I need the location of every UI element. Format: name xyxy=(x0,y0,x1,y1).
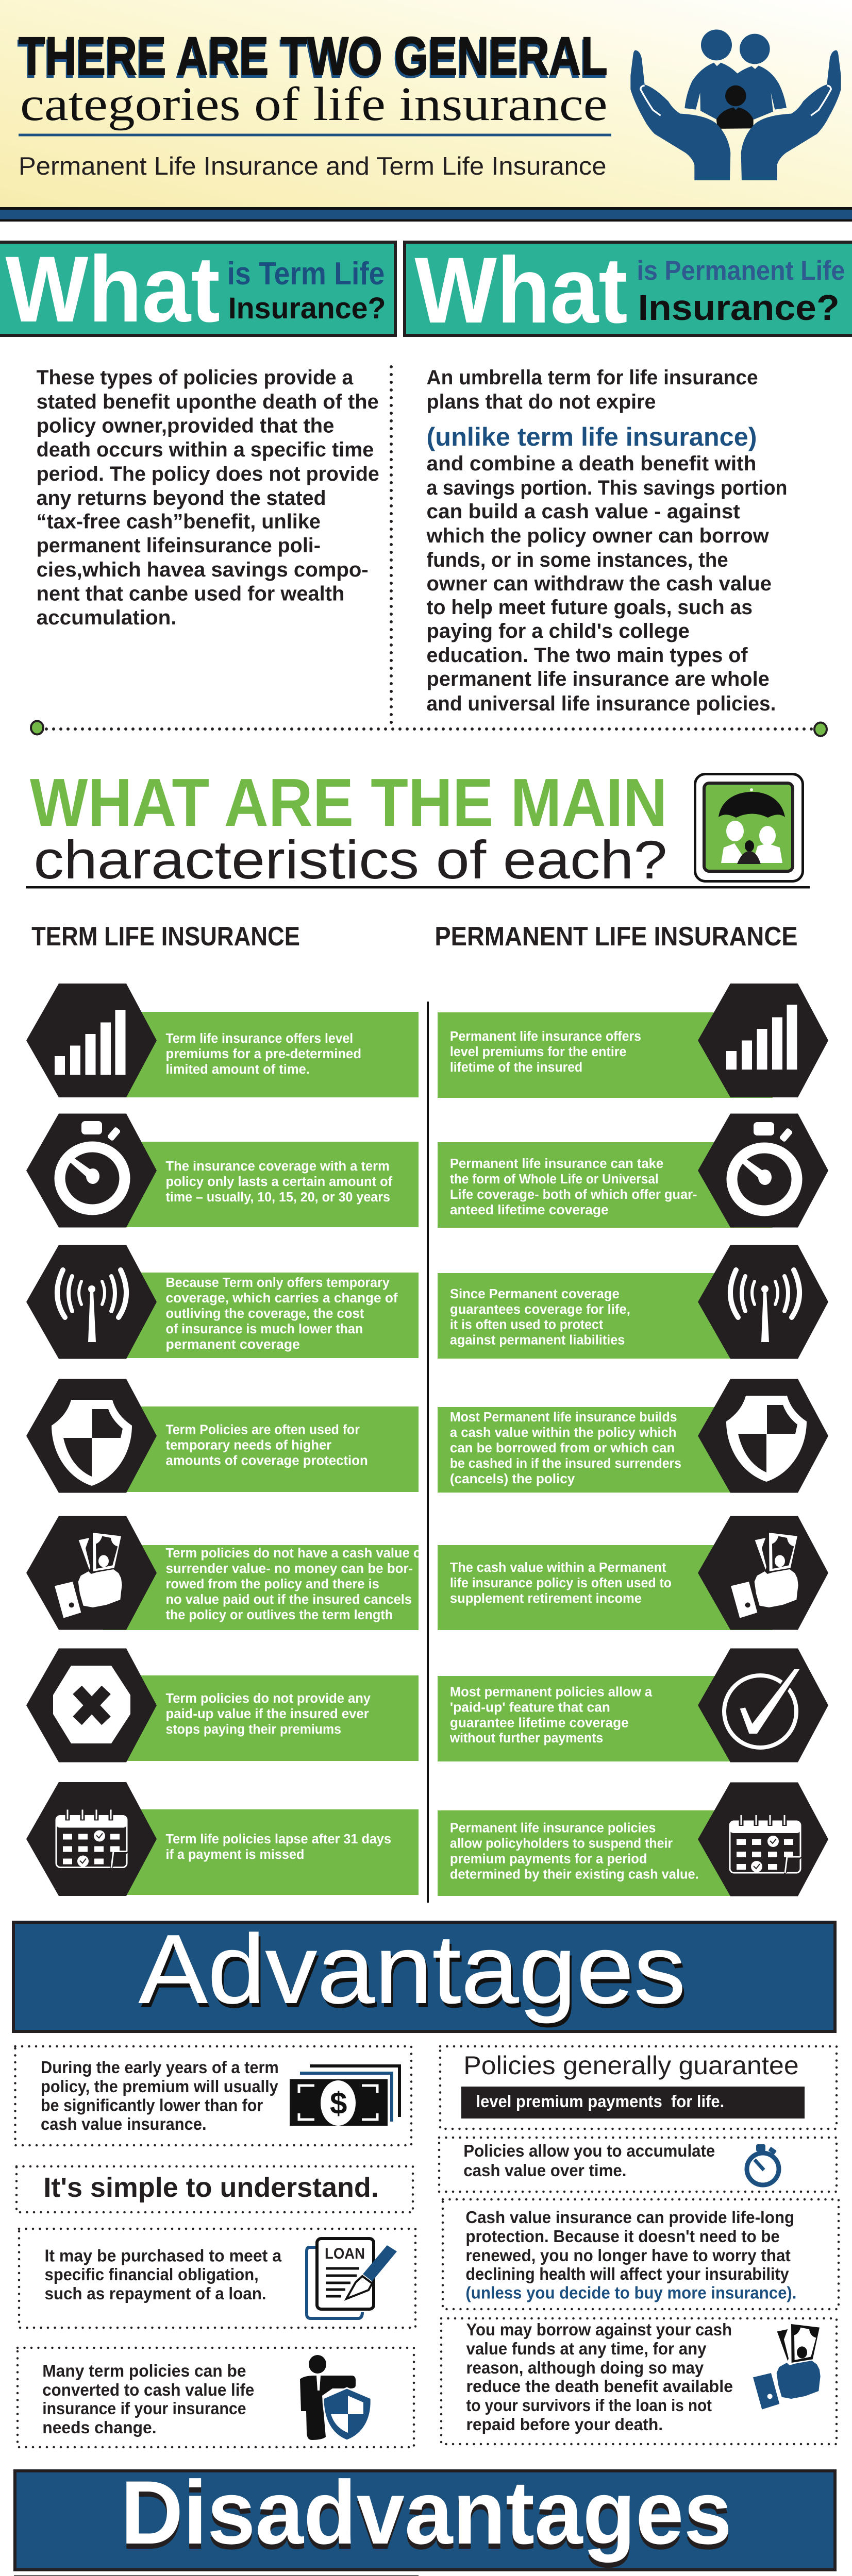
panel: what is permanent life insurance heading: What xyxy=(414,238,628,343)
row 6 permanent: paid-up feature: without further payments xyxy=(449,1731,603,1745)
row 4 permanent: builds cash value xyxy=(438,1379,828,1493)
text block: permanent life definition: and combine a death benefit with xyxy=(427,452,756,475)
row 6 term: no paid-up value: paid-up value if the insured ever xyxy=(166,1706,369,1721)
panel: borrow against cash value: You may borrow against your cash xyxy=(466,2320,732,2340)
row 5 term: no cash value: no value paid out if the insured cancels xyxy=(166,1592,412,1607)
row 4 term: temporary needs xyxy=(26,1379,419,1493)
text block: permanent life definition: can build a cash value - against xyxy=(427,500,740,523)
row 4 permanent: builds cash value: a cash value within the policy which xyxy=(450,1425,676,1440)
row 6 term: no paid-up value xyxy=(26,1649,419,1762)
text block: term life definition: nent that canbe used for wealth xyxy=(37,582,344,605)
row 7 term: lapse after 31 days: if a payment is missed xyxy=(166,1847,304,1862)
row 2 term: coverage period: time – usually, 10, 15, 20, or 30 years xyxy=(166,1190,390,1205)
row 3 term: temporary coverage: permanent coverage xyxy=(166,1337,300,1352)
panel: borrow against cash value: reason, although doing so may xyxy=(466,2359,704,2378)
row 3 term: temporary coverage: of insurance is much lower than xyxy=(166,1321,363,1336)
row 7 term: lapse after 31 days xyxy=(26,1782,419,1896)
row 3 permanent: guaranteed for life xyxy=(438,1245,828,1359)
panel: financial obligation: such as repayment of a loan. xyxy=(44,2284,266,2303)
row 3 term: temporary coverage: coverage, which carries a change of xyxy=(166,1291,398,1306)
panel: financial obligation: specific financial obligation, xyxy=(44,2265,259,2284)
row 2 term: coverage period xyxy=(26,1114,419,1227)
text block: permanent life definition: and universal life insurance policies. xyxy=(427,692,776,715)
text block: permanent life definition xyxy=(426,366,788,715)
text block: term life definition: death occurs within a specific time xyxy=(37,438,374,461)
icon: dollar bill stack: $ xyxy=(330,2086,347,2121)
row 7 permanent: suspend payments xyxy=(438,1783,828,1896)
row 1 permanent: level premiums: Permanent life insurance offers xyxy=(450,1029,641,1044)
row 1 permanent: level premiums xyxy=(438,984,828,1098)
panel: borrow against cash value: value funds at any time, for any xyxy=(466,2340,707,2359)
icon: man with shield xyxy=(300,2355,371,2441)
row 1 term: level premiums: premiums for a pre-determined xyxy=(166,1046,361,1061)
header panel xyxy=(0,0,852,222)
panel: convertible term policies xyxy=(18,2348,414,2447)
row 7 permanent: suspend payments: Permanent life insurance policies xyxy=(450,1820,656,1835)
row 2 term: coverage period: policy only lasts a certain amount of xyxy=(166,1174,392,1189)
panel: life-long protection: declining health will affect your insurability xyxy=(465,2265,789,2284)
text block: term life definition: cies,which havea savings compo- xyxy=(37,558,369,581)
row 3 term: temporary coverage: outliving the coverage, the cost xyxy=(166,1306,364,1321)
text block: permanent life definition: education. The two main types of xyxy=(427,643,748,667)
text block: permanent life definition: which the policy owner can borrow xyxy=(426,524,770,547)
row 3 permanent: guaranteed for life: guarantees coverage for life, xyxy=(450,1302,630,1317)
panel: term insurance disadvantages xyxy=(14,2575,419,2576)
panel: life-long protection: renewed, you no longer have to worry that xyxy=(465,2246,791,2265)
column heading: permanent life insurance: PERMANENT LIFE INSURANCE xyxy=(435,922,798,952)
column heading: term life insurance: TERM LIFE INSURANCE xyxy=(31,922,300,952)
title line 1: THERE ARE TWO GENERAL xyxy=(19,26,608,86)
panel: early years premium lower: be significantly lower than for xyxy=(41,2096,263,2115)
text block: term life definition: policy owner,provided that the xyxy=(37,414,334,437)
panel: life-long protection: (unless you decide to buy more insurance). xyxy=(465,2283,796,2302)
row 7 permanent: suspend payments: allow policyholders to suspend their xyxy=(450,1836,673,1851)
row 4 term: temporary needs: temporary needs of higher xyxy=(166,1437,331,1452)
row 5 permanent: supplement retirement: supplement retirement income xyxy=(450,1591,642,1606)
panel: accumulate cash value: Policies allow you to accumulate xyxy=(463,2142,715,2161)
text block: term life definition: any returns beyond the stated xyxy=(37,486,326,510)
panel: borrow against cash value: to your survivors if the loan is not xyxy=(466,2396,712,2415)
panel: what is permanent life insurance heading xyxy=(405,238,852,343)
row 5 term: no cash value: surrender value- no money can be bor- xyxy=(166,1561,413,1576)
panel: financial obligation: It may be purchased to meet a xyxy=(44,2246,282,2265)
text block: term life definition: period. The policy does not provide xyxy=(37,462,379,485)
heading: what are the main characteristics: characteristics of each? xyxy=(34,829,667,890)
text block: term life definition: stated benefit uponthe death of the xyxy=(37,390,379,413)
panel: borrow against cash value: repaid before your death. xyxy=(466,2415,663,2434)
panel: what is term life insurance heading xyxy=(0,237,395,342)
row 5 term: no cash value: the policy or outlives the term length xyxy=(166,1607,393,1622)
row 5 permanent: supplement retirement: life insurance policy is often used to xyxy=(450,1575,672,1590)
text block: permanent life definition: permanent life insurance are whole xyxy=(427,667,770,690)
row 3 permanent: guaranteed for life: against permanent liabilities xyxy=(450,1332,625,1347)
panel: accumulate cash value: cash value over time. xyxy=(463,2161,626,2180)
row 1 term: level premiums xyxy=(26,984,419,1097)
text block: permanent life definition: funds, or in some instances, the xyxy=(427,548,728,571)
panel: what is term life insurance heading: Insurance? xyxy=(228,291,386,325)
row 4 permanent: builds cash value: Most Permanent life insurance builds xyxy=(450,1410,677,1425)
text block: permanent life definition: to help meet future goals, such as xyxy=(427,596,753,619)
panel: convertible term policies: needs change. xyxy=(42,2418,157,2437)
text block: permanent life definition: (unlike term life insurance) xyxy=(427,422,757,451)
row 1 term: level premiums: Term life insurance offers level xyxy=(166,1031,353,1046)
row 4 term: temporary needs: amounts of coverage protection xyxy=(166,1453,368,1468)
icon: umbrella over family in frame xyxy=(695,774,803,881)
row 6 term: no paid-up value: Term policies do not provide any xyxy=(166,1691,371,1706)
row 3 permanent: guaranteed for life: it is often used to protect xyxy=(450,1317,603,1332)
row 4 permanent: builds cash value: be cashed in if the insured surrenders xyxy=(450,1456,681,1471)
banner: advantages: Advantages xyxy=(139,1914,686,2024)
panel: level premium payments: level premium payments for life. xyxy=(476,2092,724,2111)
text block: permanent life definition: An umbrella term for life insurance xyxy=(427,366,758,389)
text block: term life definition: accumulation. xyxy=(37,606,177,629)
row 6 term: no paid-up value: stops paying their premiums xyxy=(166,1722,341,1737)
row 4 term: temporary needs: Term Policies are often used for xyxy=(166,1422,360,1437)
panel: early years premium lower: During the early years of a term xyxy=(41,2058,279,2077)
row 6 permanent: paid-up feature: guarantee lifetime coverage xyxy=(450,1715,629,1730)
row 5 permanent: supplement retirement xyxy=(438,1516,828,1630)
row 5 term: no cash value xyxy=(26,1516,427,1630)
row 2 term: coverage period: The insurance coverage with a term xyxy=(166,1159,390,1174)
panel: convertible term policies: insurance if your insurance xyxy=(42,2399,246,2418)
text block: permanent life definition: owner can withdraw the cash value xyxy=(427,572,772,595)
panel: early years premium lower: cash value insurance. xyxy=(41,2115,207,2134)
row 2 permanent: whole or universal: Life coverage- both of which offer guar- xyxy=(450,1187,697,1202)
panel: accumulate cash value xyxy=(439,2138,837,2192)
row 1 permanent: level premiums: lifetime of the insured xyxy=(450,1060,582,1075)
title line 1: THERE ARE TWO GENERAL xyxy=(18,28,606,89)
panel: borrow against cash value: reduce the death benefit available xyxy=(466,2377,733,2396)
row 5 permanent: supplement retirement: The cash value within a Permanent xyxy=(450,1560,666,1575)
panel: what is term life insurance heading: What xyxy=(6,237,220,342)
header rule bands xyxy=(0,207,852,222)
row 1 permanent: level premiums: level premiums for the entire xyxy=(450,1044,626,1059)
panel: borrow against cash value xyxy=(441,2318,837,2444)
text block: permanent life definition: a savings portion. This savings portion xyxy=(427,476,788,499)
row 6 permanent: paid-up feature: 'paid-up' feature that can xyxy=(450,1700,610,1715)
panel: simple to understand: It's simple to understand. xyxy=(43,2172,379,2203)
row 3 permanent: guaranteed for life: Since Permanent coverage xyxy=(450,1286,620,1301)
text block: term life definition: permanent lifeinsurance poli- xyxy=(37,534,321,557)
row 6 permanent: paid-up feature xyxy=(438,1649,828,1762)
heading: what are the main characteristics: WHAT ARE THE MAIN xyxy=(30,764,667,840)
icon: hands holding family xyxy=(630,29,841,180)
row 2 permanent: whole or universal xyxy=(438,1114,828,1228)
text block: term life definition xyxy=(37,366,379,629)
panel: simple to understand xyxy=(16,2166,413,2212)
panel: financial obligation xyxy=(19,2229,415,2328)
row 3 term: temporary coverage xyxy=(26,1245,419,1359)
panel: life-long protection xyxy=(443,2199,839,2309)
row 5 term: no cash value: Term policies do not have a cash value or xyxy=(166,1546,427,1561)
row 5 term: no cash value: rowed from the policy and there is xyxy=(166,1577,379,1591)
banner: disadvantages: Disadvantages xyxy=(121,2467,732,2568)
panel: life-long protection: Cash value insurance can provide life-long xyxy=(465,2208,794,2227)
panel: level premium payments xyxy=(440,2046,837,2129)
icon: loan document: LOAN xyxy=(325,2245,365,2262)
row 7 permanent: suspend payments: premium payments for a period xyxy=(450,1851,647,1866)
row 7 permanent: suspend payments: determined by their existing cash value. xyxy=(450,1867,699,1882)
banner: advantages xyxy=(13,1914,835,2031)
text block: term life definition: “tax-free cash”benefit, unlike xyxy=(37,510,321,533)
panel: level premium payments: Policies generally guarantee xyxy=(463,2050,799,2080)
text block: permanent life definition: plans that do not expire xyxy=(427,390,656,413)
title underline xyxy=(19,134,611,136)
row 2 permanent: whole or universal: anteed lifetime coverage xyxy=(450,1202,609,1217)
row 3 term: temporary coverage: Because Term only offers temporary xyxy=(166,1275,390,1290)
row 4 permanent: builds cash value: can be borrowed from or which can xyxy=(450,1440,675,1455)
panel: convertible term policies: converted to cash value life xyxy=(42,2381,254,2400)
row 6 permanent: paid-up feature: Most permanent policies allow a xyxy=(450,1684,653,1699)
panel: early years premium lower: policy, the premium will usually xyxy=(41,2077,278,2096)
text block: permanent life definition: paying for a child's college xyxy=(427,619,690,642)
panel: convertible term policies: Many term policies can be xyxy=(42,2362,246,2381)
icon: hand holding money xyxy=(753,2324,821,2410)
icon: dollar bill stack xyxy=(290,2066,399,2126)
banner: disadvantages: Disadvantages xyxy=(121,2462,732,2563)
heading underline xyxy=(26,886,810,888)
panel: what is term life insurance heading: is Term Life xyxy=(227,256,385,292)
subtitle: Permanent Life Insurance and Term Life Insurance xyxy=(19,151,606,180)
text block: term life definition: These types of policies provide a xyxy=(37,366,354,389)
heading: what are the main characteristics xyxy=(30,764,667,890)
icon: blue stopwatch xyxy=(747,2144,779,2185)
panel: early years premium lower xyxy=(15,2046,411,2145)
row 4 permanent: builds cash value: (cancels) the policy xyxy=(450,1471,575,1486)
icon: loan document xyxy=(307,2239,397,2318)
panel: life-long protection: protection. Because it doesn't need to be xyxy=(465,2227,780,2246)
row 7 term: lapse after 31 days: Term life policies lapse after 31 days xyxy=(166,1832,391,1846)
title line 2: categories of life insurance xyxy=(20,77,608,130)
row 2 permanent: whole or universal: the form of Whole Life or Universal xyxy=(450,1172,659,1187)
row 2 permanent: whole or universal: Permanent life insurance can take xyxy=(450,1156,663,1171)
row 1 term: level premiums: limited amount of time. xyxy=(166,1062,310,1077)
panel: what is permanent life insurance heading: Insurance? xyxy=(638,288,840,328)
banner: advantages: Advantages xyxy=(141,1919,688,2028)
